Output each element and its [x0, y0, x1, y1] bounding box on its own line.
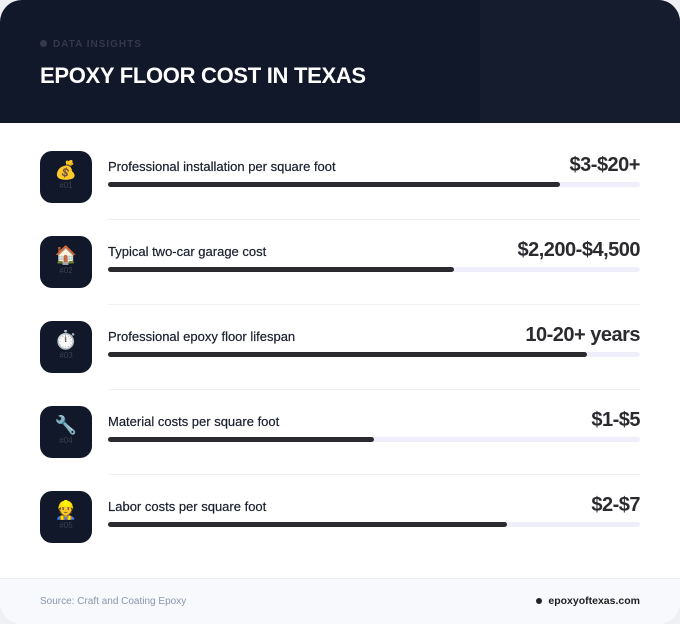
icon: stopwatch: #03 [59, 351, 73, 360]
icon: construction worker: #05 [59, 521, 73, 530]
icon: money bag: 💰 [55, 160, 77, 180]
source: Source: Craft and Coating Epoxy [40, 596, 186, 607]
icon: house [40, 236, 92, 288]
row 4 [40, 406, 640, 458]
label 4: Material costs per square foot [108, 414, 279, 429]
value 5: $2-$7 [591, 494, 640, 516]
icon: money bag [40, 151, 92, 203]
value 4: $1-$5 [591, 409, 640, 431]
label 1: Professional installation per square foot [108, 159, 336, 174]
icon: construction worker [40, 491, 92, 543]
label 2: Typical two-car garage cost [108, 244, 266, 259]
bar 5 [108, 522, 640, 527]
icon: wrench: #04 [59, 436, 73, 445]
icon: wrench: 🔧 [55, 415, 77, 435]
bar 4 [108, 437, 640, 442]
row 5 [40, 491, 640, 543]
value 1: $3-$20+ [570, 154, 640, 176]
value 3: 10-20+ years [525, 324, 640, 346]
icon: stopwatch [40, 321, 92, 373]
bar 2 [108, 267, 640, 272]
label 3: Professional epoxy floor lifespan [108, 329, 295, 344]
icon: house: 🏠 [55, 245, 77, 265]
footer [0, 578, 680, 624]
icon: construction worker: 👷 [55, 500, 77, 520]
header [0, 0, 680, 123]
value 2: $2,200-$4,500 [517, 239, 640, 261]
icon: house: #02 [59, 266, 73, 275]
icon: stopwatch: ⏱️ [55, 330, 77, 350]
icon: wrench [40, 406, 92, 458]
bar 1 [108, 182, 640, 187]
row 3 [40, 321, 640, 373]
label 5: Labor costs per square foot [108, 499, 266, 514]
website: epoxyoftexas.com [548, 595, 640, 607]
kicker: data insights: DATA INSIGHTS [53, 39, 142, 50]
title: EPOXY FLOOR COST IN TEXAS [40, 63, 366, 88]
icon: money bag: #01 [59, 181, 73, 190]
row 2 [40, 236, 640, 288]
bar 3 [108, 352, 640, 357]
row 1 [40, 151, 640, 203]
